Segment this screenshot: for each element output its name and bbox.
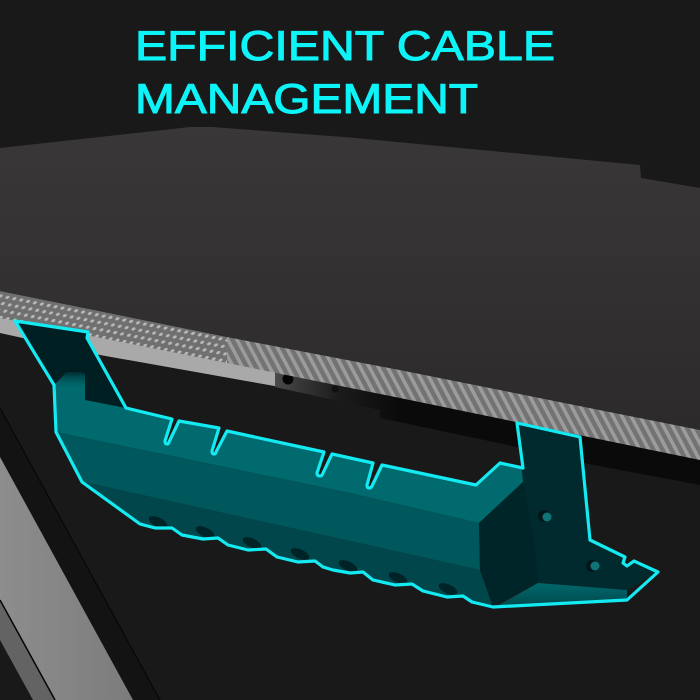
title: EFFICIENT CABLE (135, 22, 555, 69)
tray cable holes (147, 514, 459, 597)
tray lower face (82, 482, 493, 607)
screw upper (538, 510, 552, 522)
bracket foot (495, 583, 627, 607)
tray neck shadow (54, 372, 85, 390)
desk top surface (0, 127, 700, 430)
tray end cap (479, 482, 538, 606)
desk carbon fibre edge (0, 291, 700, 460)
screw lower (586, 560, 600, 572)
desk underside hardware (0, 316, 700, 485)
right mounting bracket (517, 423, 658, 590)
desk leg (0, 408, 160, 700)
cable tray bracket highlighted in cyan (15, 321, 658, 607)
tray middle face (56, 432, 480, 570)
left mounting bracket (15, 321, 126, 408)
cyan outline (15, 321, 658, 607)
title: MANAGEMENT (135, 75, 478, 122)
tray top face (54, 372, 523, 523)
